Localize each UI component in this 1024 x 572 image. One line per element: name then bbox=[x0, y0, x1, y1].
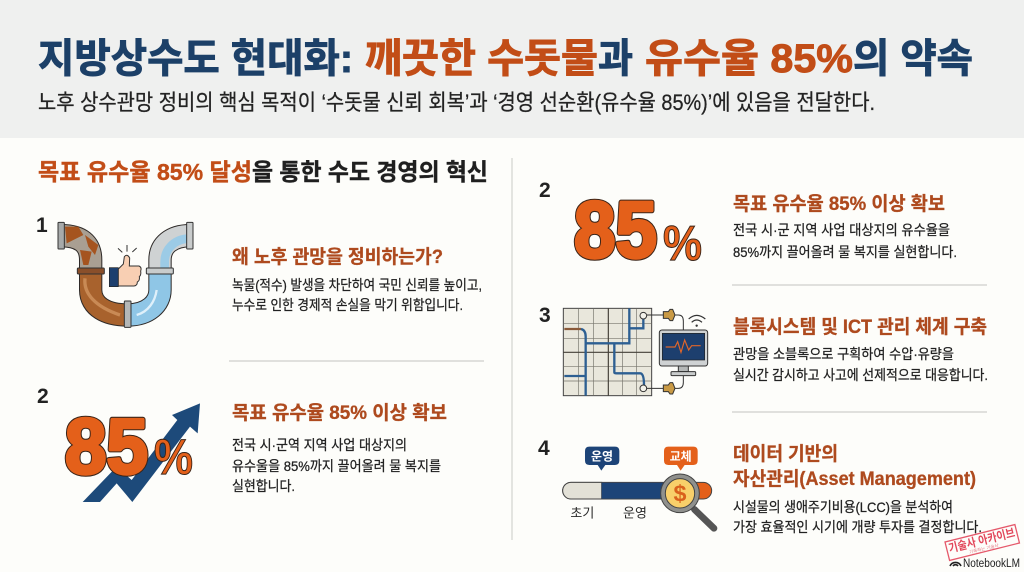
icon: lifecycle bar with magnifier: 운영 bbox=[623, 505, 647, 520]
stamp: archive watermark: 기록하는 기술사 bbox=[968, 542, 1000, 556]
body text bbox=[232, 277, 482, 313]
heading: 데이터 기반의 bbox=[733, 443, 838, 465]
heading bbox=[733, 443, 976, 490]
icon: 85% with rising arrow: % bbox=[154, 429, 193, 485]
body text: 85%까지 끌어올려 물 복지를 실현합니다. bbox=[733, 244, 957, 260]
icon: 85% bbox=[574, 185, 702, 274]
title: 의 약속 bbox=[853, 37, 973, 81]
icon: lifecycle bar with magnifier: 운영 bbox=[591, 450, 613, 464]
icon: rusty pipe turning clean with thumbs up bbox=[58, 222, 193, 327]
title: 깨끗한 수돗물 bbox=[365, 37, 598, 81]
body text: 실현합니다. bbox=[232, 478, 295, 494]
title bbox=[38, 37, 973, 81]
body text: 실시간 감시하고 사고에 선제적으로 대응합니다. bbox=[733, 367, 988, 383]
header band bbox=[0, 0, 1024, 138]
icon: 85%: 85 bbox=[574, 185, 657, 274]
title: 지방상수도 현대화: bbox=[38, 37, 353, 81]
icon: lifecycle bar with magnifier: 교체 bbox=[670, 450, 692, 464]
icon: 85% with rising arrow bbox=[65, 402, 200, 502]
body text bbox=[733, 222, 957, 260]
body text: 유수울을 85%까지 끌어올려 물 복지를 bbox=[232, 458, 441, 474]
body text bbox=[733, 499, 982, 535]
panel: secure 85 percent, left bbox=[37, 385, 447, 502]
number 2: 2 bbox=[539, 179, 551, 202]
number 3: 3 bbox=[539, 304, 551, 327]
body text: 가장 효율적인 시기에 개량 투자를 결정합니다. bbox=[733, 519, 982, 535]
title: 유수율 85% bbox=[645, 37, 853, 81]
panel: data-based asset management bbox=[538, 437, 982, 535]
panel: secure 85 percent, right bbox=[539, 179, 957, 274]
body text: 전국 시·군 지역 사업 대상지의 유수율을 bbox=[733, 222, 950, 238]
section heading: 목표 유수율 85% 달성 bbox=[38, 159, 252, 185]
subtitle: 노후 상수관망 정비의 핵심 목적이 ‘수돗물 신뢰 회복’과 ‘경영 선순환(유수율 85%)’에 있음을 전달한다. bbox=[38, 90, 875, 115]
icon: 85% with rising arrow: 85 bbox=[65, 402, 148, 490]
section heading bbox=[38, 159, 488, 185]
body text: 녹물(적수) 발생을 차단하여 국민 신뢰를 높이고, bbox=[232, 277, 482, 293]
title: 과 bbox=[598, 37, 633, 81]
panel: block system and ICT bbox=[539, 304, 988, 396]
body text: 누수로 인한 경제적 손실을 막기 위함입니다. bbox=[232, 297, 463, 313]
icon: lifecycle bar with magnifier bbox=[563, 447, 714, 528]
section heading: 을 통한 수도 경영의 혁신 bbox=[252, 159, 488, 185]
icon: 85%: 85 bbox=[574, 185, 657, 274]
heading: 왜 노후 관망을 정비하는가? bbox=[232, 246, 443, 268]
icon: 85%: % bbox=[663, 217, 702, 271]
heading: 자산관리(Asset Management) bbox=[733, 468, 976, 490]
icon: pipe grid and monitor bbox=[563, 308, 708, 396]
number 4: 4 bbox=[538, 437, 550, 460]
heading: 목표 유수율 85% 이상 확보 bbox=[232, 402, 447, 424]
number 1: 1 bbox=[36, 214, 48, 237]
body text: 시설물의 생애주기비용(LCC)을 분석하여 bbox=[733, 499, 953, 515]
panel: why renew old pipes bbox=[36, 214, 482, 327]
body text bbox=[733, 346, 988, 383]
heading: 블록시스템 및 ICT 관리 체계 구축 bbox=[733, 316, 987, 338]
icon: lifecycle bar with magnifier: $ bbox=[674, 481, 687, 507]
body text: 전국 시·군역 지역 사업 대상지의 bbox=[232, 437, 407, 453]
body text bbox=[232, 437, 441, 494]
icon: lifecycle bar with magnifier: 초기 bbox=[570, 505, 594, 520]
number 2: 2 bbox=[37, 385, 49, 408]
body text: 관망을 소블록으로 구획하여 수압·유량을 bbox=[733, 346, 954, 362]
heading: 목표 유수율 85% 이상 확보 bbox=[733, 193, 945, 215]
icon: 85% with rising arrow: 85 bbox=[65, 402, 148, 490]
